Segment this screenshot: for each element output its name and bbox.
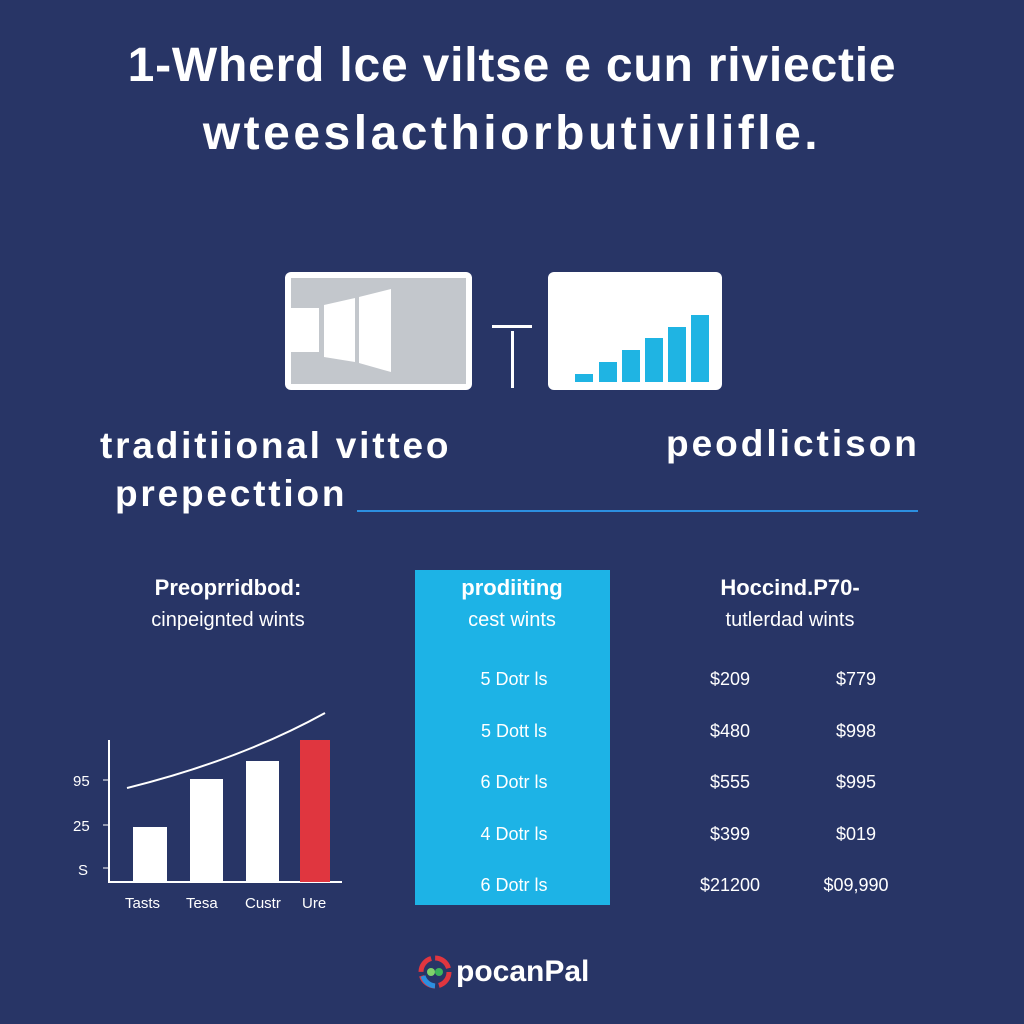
panel: prediction cost: 5 Dott ls xyxy=(481,720,547,740)
right column heading xyxy=(720,575,860,631)
left column heading: cinpeignted wints xyxy=(151,609,305,631)
left column heading xyxy=(151,575,305,631)
price table xyxy=(700,669,889,895)
right column heading: tutlerdad wints xyxy=(726,609,854,631)
left column heading: Preoprridbod: xyxy=(155,575,301,600)
bar chart: Ure xyxy=(302,895,326,912)
blue divider line xyxy=(357,510,918,512)
title: 1-Wherd lce viltse e cun riviectie xyxy=(128,39,896,92)
panel: prediction cost: 5 Dotr ls xyxy=(480,669,548,689)
text: $21200 xyxy=(700,875,760,895)
icon: prediction bar chart panel xyxy=(548,272,722,390)
icon: traditional video panel xyxy=(285,272,472,390)
text: $998 xyxy=(836,720,876,740)
heading: prediction: peodlictison xyxy=(666,423,920,464)
title xyxy=(128,39,896,160)
panel: prediction cost: 6 Dotr ls xyxy=(480,875,548,895)
bar chart: 25 xyxy=(73,818,90,835)
title: wteeslacthiorbutivilifle. xyxy=(203,107,821,160)
bar chart: S xyxy=(78,862,88,879)
text: $399 xyxy=(710,824,750,844)
bar chart xyxy=(73,712,342,912)
right column heading: Hoccind.P70- xyxy=(720,575,860,600)
bar chart: Tesa xyxy=(186,895,218,912)
logo: pocanPal xyxy=(456,955,589,988)
text: $019 xyxy=(836,824,876,844)
text: $555 xyxy=(710,772,750,792)
heading: traditional xyxy=(100,425,451,514)
text: $779 xyxy=(836,669,876,689)
text: $995 xyxy=(836,772,876,792)
bar chart: 95 xyxy=(73,773,90,790)
panel: prediction cost: 6 Dotr ls xyxy=(480,772,548,792)
bar chart: Custr xyxy=(245,895,281,912)
panel: prediction cost: 4 Dotr ls xyxy=(480,824,548,844)
panel: prediction cost xyxy=(415,570,610,905)
heading: traditional: traditiional vitteo xyxy=(100,425,451,466)
bar chart: Tasts xyxy=(125,895,160,912)
icon: T connector xyxy=(492,325,532,388)
text: $209 xyxy=(710,669,750,689)
heading: traditional: prepecttion xyxy=(115,473,347,514)
panel: prediction cost: cest wints xyxy=(468,609,556,631)
text: $09,990 xyxy=(823,875,889,895)
panel: prediction cost: prodiiting xyxy=(461,575,563,600)
text: $480 xyxy=(710,720,750,740)
